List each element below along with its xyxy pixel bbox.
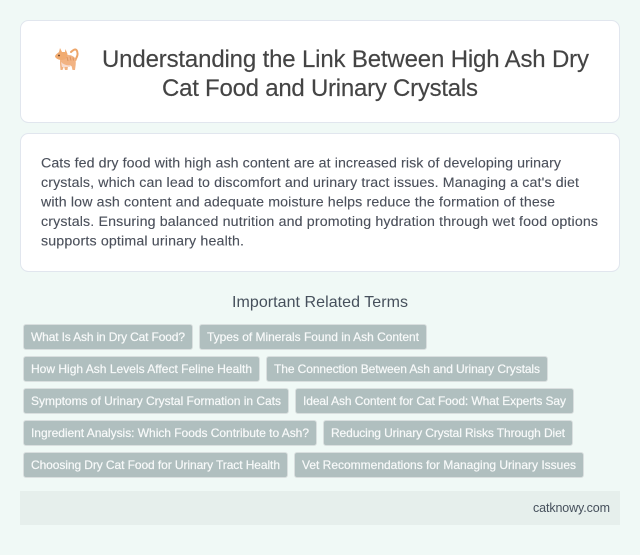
text block: summary: crystals, which can lead to discomfort and urinary tract issues. Managing a cat's diet (41, 175, 579, 191)
text block: summary: with low ash content and adequate moisture helps reduce the formation of these (40, 194, 555, 210)
tag: choosing food: Choosing Dry Cat Food for Urinary Tract Health (31, 458, 280, 472)
title: Understanding the Link Between High Ash Dry (102, 46, 589, 73)
tag: what is ash (24, 324, 192, 350)
footer: catknowy.com (533, 501, 610, 515)
tag: connection: The Connection Between Ash and Urinary Crystals (274, 362, 540, 376)
text block: summary: crystals. Ensuring balanced nutrition and promoting hydration through wet food options (41, 214, 598, 230)
tag: vet recommendations: Vet Recommendations for Managing Urinary Issues (302, 458, 576, 472)
text block: summary: supports optimal urinary health. (41, 234, 244, 250)
text block: summary: Cats fed dry food with high ash content are at increased risk of developing urinary (41, 156, 562, 172)
tag: high ash levels (24, 356, 260, 382)
term tags (24, 324, 584, 478)
tag: vet recommendations (294, 452, 584, 478)
tag: high ash levels: How High Ash Levels Affect Feline Health (31, 362, 252, 376)
tag: reducing risks (324, 420, 572, 446)
title (102, 46, 589, 102)
tag: reducing risks: Reducing Urinary Crystal Risks Through Diet (331, 426, 566, 440)
tag: symptoms (24, 388, 288, 414)
tag: types of minerals: Types of Minerals Found in Ash Content (207, 330, 420, 344)
text block: summary (40, 156, 598, 250)
panel: title card (20, 20, 620, 122)
tag: types of minerals (200, 324, 426, 350)
tag: connection (266, 356, 548, 382)
heading: related terms: Important Related Terms (232, 294, 408, 311)
panel: summary text card (20, 134, 620, 272)
tag: ingredient analysis (24, 420, 316, 446)
tag: choosing food (24, 452, 288, 478)
footer (20, 491, 620, 525)
tag: ideal ash content: Ideal Ash Content for Cat Food: What Experts Say (303, 394, 566, 408)
icon: cat (55, 48, 78, 70)
tag: ideal ash content (296, 388, 574, 414)
title: Cat Food and Urinary Crystals (162, 75, 478, 102)
tag: what is ash: What Is Ash in Dry Cat Food? (31, 330, 185, 344)
tag: ingredient analysis: Ingredient Analysis: Which Foods Contribute to Ash? (31, 426, 309, 440)
tag: symptoms: Symptoms of Urinary Crystal Formation in Cats (31, 394, 281, 408)
